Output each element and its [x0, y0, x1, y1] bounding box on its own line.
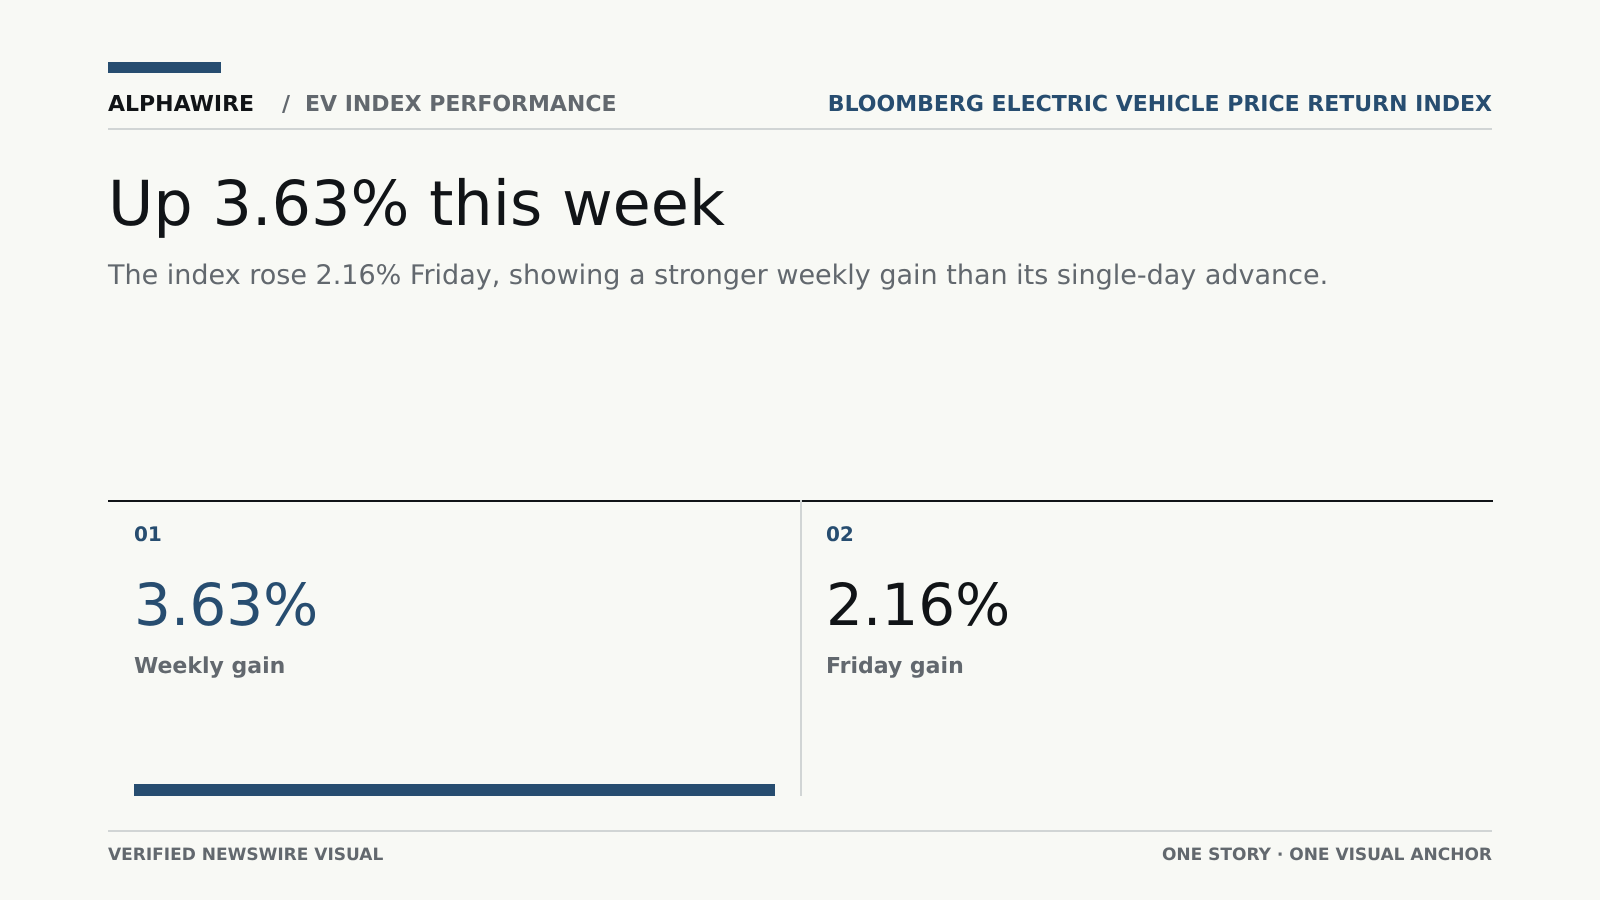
- panel number: 01: [134, 522, 162, 546]
- subheading: The index rose 2.16% Friday, showing a stronger weekly gain than its single-day advance.: [108, 260, 1328, 291]
- panel: friday gain: [826, 522, 1010, 679]
- weekly label: Weekly gain: [134, 654, 285, 679]
- footer right: ONE STORY · ONE VISUAL ANCHOR: [1162, 845, 1492, 865]
- accent bar: [108, 62, 221, 73]
- friday label: Friday gain: [826, 654, 964, 679]
- footer left: VERIFIED NEWSWIRE VISUAL: [108, 845, 383, 865]
- header: [108, 92, 1492, 117]
- top rule of stat panels: [108, 500, 1493, 502]
- headline: Up 3.63% this week: [108, 167, 725, 240]
- index name: BLOOMBERG ELECTRIC VEHICLE PRICE RETURN INDEX: [828, 92, 1492, 117]
- section label: EV INDEX PERFORMANCE: [305, 92, 616, 117]
- panel: weekly gain: [134, 500, 802, 796]
- section label: /: [282, 92, 290, 117]
- panel number: 02: [826, 522, 854, 546]
- weekly value: 3.63%: [134, 571, 318, 639]
- brand label: ALPHAWIRE: [108, 92, 254, 117]
- friday value: 2.16%: [826, 571, 1010, 639]
- weekly bar: [134, 784, 775, 796]
